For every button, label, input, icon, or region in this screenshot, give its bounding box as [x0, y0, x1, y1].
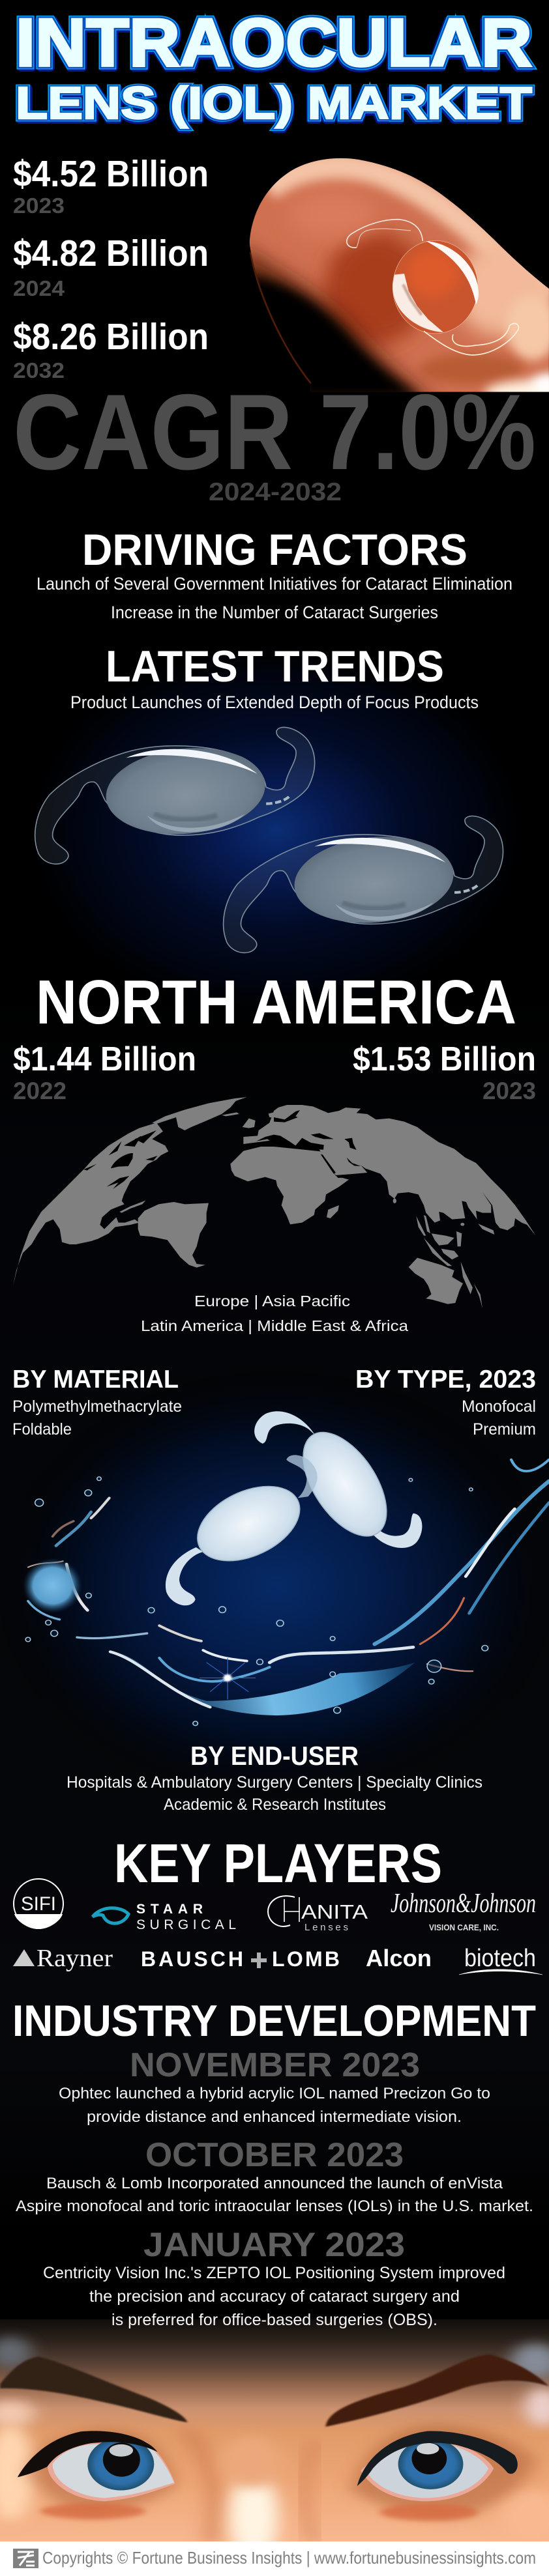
eye: right [350, 2425, 536, 2521]
panel: latest trends [70, 642, 479, 712]
stat: 2024 value [13, 233, 209, 300]
blue glow behind lenses [16, 635, 537, 1025]
development: october 2023 [16, 2136, 533, 2215]
logo: STAAR Surgical: SURGICAL [136, 1917, 236, 1932]
development: november 2023 [59, 2046, 490, 2126]
intraocular lens on fingertip [347, 220, 518, 355]
title: INTRAOCULAR [16, 5, 532, 81]
stat: 2023 value: 2023 [13, 193, 65, 218]
stat: 2024 value: 2024 [13, 276, 65, 300]
water: splash orb [23, 1558, 82, 1613]
logo: Hanita Lenses: ANITA [301, 1900, 368, 1923]
panel: by type: Monofocal [462, 1397, 536, 1416]
stat: 2032 value: 2032 [13, 358, 65, 382]
title: INTRAOCULAR [16, 5, 532, 81]
development: october 2023: Aspire monofocal and toric intraocular lenses (IOLs) in the U.S. market. [16, 2197, 533, 2215]
logo: Bausch + Lomb: BAUSCH [141, 1947, 243, 1971]
stat: 2024 value: $4.82 Billion [13, 233, 209, 274]
panel: by type: BY TYPE, 2023 [355, 1366, 536, 1394]
logo: Bausch + Lomb [141, 1947, 340, 1971]
image: close-up of eyes [0, 2319, 549, 2560]
panel: by material: Foldable [12, 1420, 72, 1438]
development: november 2023: provide distance and enhanced intermediate vision. [87, 2108, 462, 2126]
panel: by material: BY MATERIAL [12, 1366, 179, 1394]
eastern hemisphere land [230, 1105, 536, 1308]
panel: latest trends: LATEST TRENDS [106, 642, 444, 691]
water: large crescent wave [108, 1652, 415, 1715]
stat: north america 2023: $1.53 Billion [353, 1040, 536, 1078]
panel: by end-user: Academic & Research Institutes [164, 1796, 386, 1814]
panel: by end-user: Hospitals & Ambulatory Surgery Centers | Specialty Clinics [67, 1773, 482, 1792]
stat: 2023 value [13, 153, 209, 218]
title: INTRAOCULAR [17, 7, 531, 82]
title: LENS (IOL) MARKET [16, 78, 532, 128]
eyebrow: left [0, 2356, 187, 2422]
development: november 2023: Ophtec launched a hybrid acrylic IOL named Precizon Go to [59, 2085, 490, 2102]
stat: 2023 value: $4.52 Billion [13, 153, 209, 195]
blue glow behind lens splash [0, 1364, 549, 1807]
panel: driving factors [37, 525, 512, 622]
regions list [141, 1293, 408, 1334]
logo: STAAR Surgical: STAAR [136, 1902, 203, 1917]
development: october 2023: Bausch & Lomb Incorporated announced the launch of enVista [46, 2175, 503, 2192]
logo: Alcon: Alcon [366, 1945, 432, 1971]
regions list: Latin America | Middle East & Africa [141, 1317, 408, 1334]
stat: north america 2023: 2023 [482, 1078, 536, 1104]
logo: Hanita Lenses [268, 1896, 368, 1933]
lens: left [166, 1455, 318, 1605]
development: november 2023: NOVEMBER 2023 [130, 2046, 420, 2084]
development: january 2023: Centricity Vision Inc.'s ZEPTO IOL Positioning System improved [43, 2264, 505, 2282]
development: january 2023: JANUARY 2023 [143, 2226, 405, 2264]
logo: Johnson & Johnson [391, 1889, 536, 1932]
title: LENS (IOL) MARKET [17, 79, 531, 130]
image: fingertip holding intraocular lens [249, 158, 549, 392]
panel: latest trends: Product Launches of Extended Depth of Focus Products [70, 693, 479, 712]
sparkle [200, 1658, 256, 1700]
eyebrow: right [325, 2354, 549, 2427]
stat: north america 2022: $1.44 Billion [13, 1040, 196, 1078]
development: january 2023 [43, 2226, 505, 2329]
western hemisphere land [13, 1097, 246, 1285]
stat: north america 2022: 2022 [13, 1078, 67, 1104]
panel: driving factors: Increase in the Number of Cataract Surgeries [111, 603, 438, 622]
logo: SIFI: SIFI [21, 1893, 56, 1915]
heading: key players: KEY PLAYERS [114, 1833, 442, 1894]
title: INTRAOCULAR [16, 5, 532, 81]
water: streams [28, 1459, 549, 1707]
icon: Fortune Business Insights logo [13, 2549, 38, 2568]
title [16, 5, 532, 130]
lens: right [254, 1411, 422, 1548]
logo: Rayner: Rayner [37, 1945, 113, 1972]
regions list: Europe | Asia Pacific [194, 1293, 350, 1309]
stat: 2032 value: $8.26 Billion [13, 316, 209, 358]
eye: left [18, 2429, 177, 2519]
logo: biotech: biotech [464, 1945, 536, 1972]
title: LENS (IOL) MARKET [16, 78, 532, 128]
panel: by type [355, 1366, 536, 1438]
development: january 2023: is preferred for office-based surgeries (OBS). [111, 2311, 438, 2329]
water droplets [25, 1477, 488, 1726]
stat: north america 2022 [13, 1040, 196, 1104]
logo: Johnson & Johnson: VISION CARE, INC. [429, 1923, 499, 1932]
panel: driving factors: Launch of Several Government Initiatives for Cataract Elimination [37, 574, 512, 594]
footer [0, 2541, 549, 2576]
logo: Bausch + Lomb: LOMB [272, 1947, 340, 1971]
panel: driving factors: DRIVING FACTORS [82, 525, 467, 575]
CAGR: 2024-2032 [209, 478, 342, 506]
panel: by material: Polymethylmethacrylate [12, 1397, 182, 1416]
title: LENS (IOL) MARKET [16, 78, 532, 128]
panel: by material [12, 1366, 182, 1438]
image: two intraocular lenses [35, 727, 503, 952]
panel: by end-user [67, 1741, 482, 1814]
development: october 2023: OCTOBER 2023 [145, 2136, 404, 2174]
panel: by end-user: BY END-USER [190, 1741, 359, 1771]
panel: by type: Premium [473, 1420, 536, 1438]
stat: north america 2023 [353, 1040, 536, 1104]
logo: Hanita Lenses: Lenses [304, 1922, 348, 1933]
image: lenses with water splash [23, 1411, 549, 1726]
map: world globe [13, 1097, 536, 1308]
logo: STAAR Surgical [93, 1902, 236, 1932]
stat: 2032 value [13, 316, 209, 382]
development: january 2023: the precision and accuracy of cataract surgery and [89, 2287, 460, 2306]
logo: SIFI [14, 1879, 63, 1929]
